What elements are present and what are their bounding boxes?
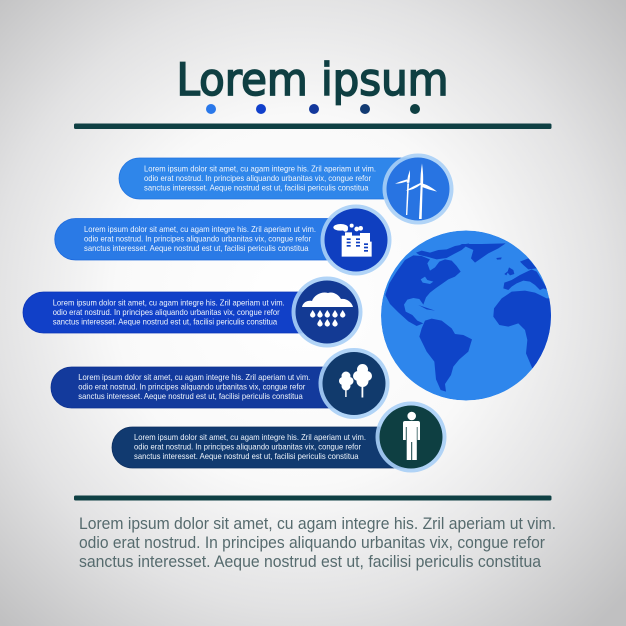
text 2: odio erat nostrud. In principes aliquando urbanitas vix, congue refor (84, 234, 311, 244)
text 4: Lorem ipsum dolor sit amet, cu agam integre his. Zril aperiam ut vim. (78, 372, 310, 382)
icon circle 3 (292, 276, 362, 348)
bar 1 (119, 158, 418, 199)
progress dots (206, 104, 420, 114)
icon: person (403, 412, 420, 460)
great lakes (421, 277, 433, 284)
text 5 (134, 432, 366, 461)
top divider (74, 124, 552, 129)
text 3 (53, 298, 285, 327)
text 2: sanctus interesset. Aeque nostrud est ut, facilisi periculis constitua (84, 243, 309, 253)
british isles (504, 267, 514, 275)
text 4 (78, 372, 310, 401)
bar 5 (112, 427, 411, 468)
iceland (496, 257, 502, 260)
panel: rain cloud (23, 276, 362, 348)
continent: africa (493, 290, 551, 368)
text 2 (84, 224, 316, 253)
globe (381, 230, 551, 400)
panel: person (112, 402, 446, 472)
text 4: sanctus interesset. Aeque nostrud est ut, facilisi periculis constitua (78, 391, 303, 401)
text 3: Lorem ipsum dolor sit amet, cu agam integre his. Zril aperiam ut vim. (53, 298, 285, 308)
continent: europe (503, 269, 550, 291)
icon: wind turbines (395, 163, 437, 219)
western hemisphere land (385, 243, 469, 326)
scandinavia (520, 258, 537, 269)
text 1: sanctus interesset. Aeque nostrud est ut, facilisi periculis constitua (144, 183, 369, 193)
text 3: odio erat nostrud. In principes aliquando urbanitas vix, congue refor (53, 307, 280, 317)
panel: factory (55, 204, 391, 276)
text 3: sanctus interesset. Aeque nostrud est ut, facilisi periculis constitua (53, 317, 277, 327)
text 1 (144, 164, 376, 193)
continent: north america (385, 255, 461, 326)
bar 2 (55, 218, 356, 260)
bottom text block: sanctus interesset. Aeque nostrud est ut, facilisi periculis constitua (79, 553, 542, 571)
icon circle 4 (318, 348, 390, 419)
text 5: sanctus interesset. Aeque nostrud est ut, facilisi periculis constitua (134, 451, 359, 461)
icon: cloud and rain (302, 292, 353, 326)
text 5: Lorem ipsum dolor sit amet, cu agam integre his. Zril aperiam ut vim. (134, 432, 366, 442)
text 1: Lorem ipsum dolor sit amet, cu agam integre his. Zril aperiam ut vim. (144, 164, 376, 174)
text 5: odio erat nostrud. In principes aliquando urbanitas vix, congue refor (134, 442, 361, 452)
icon: factory (333, 224, 372, 257)
icon circle 5 (376, 402, 446, 472)
eastern land (460, 243, 550, 291)
bar 4 (51, 367, 354, 408)
bar 3 (23, 292, 327, 333)
bottom text block: Lorem ipsum dolor sit amet, cu agam integre his. Zril aperiam ut vim. (79, 515, 556, 533)
icon: trees (339, 364, 372, 398)
bottom text block (79, 515, 556, 571)
panel: trees (51, 348, 389, 419)
text 1: odio erat nostrud. In principes aliquando urbanitas vix, congue refor (144, 173, 371, 183)
text 4: odio erat nostrud. In principes aliquando urbanitas vix, congue refor (78, 382, 305, 392)
bottom divider (74, 496, 552, 500)
caribbean islands (418, 305, 435, 311)
arctic islands (416, 243, 469, 259)
continent: greenland (460, 243, 506, 263)
bottom text block: odio erat nostrud. In principes aliquando urbanitas vix, congue refor (79, 534, 546, 552)
continent: south america (419, 319, 472, 392)
title: Lorem ipsum (176, 55, 448, 106)
icon circle 2 (320, 204, 392, 276)
icon circle 1 (382, 154, 454, 224)
panel: wind energy (119, 154, 453, 224)
text 2: Lorem ipsum dolor sit amet, cu agam integre his. Zril aperiam ut vim. (84, 224, 316, 234)
